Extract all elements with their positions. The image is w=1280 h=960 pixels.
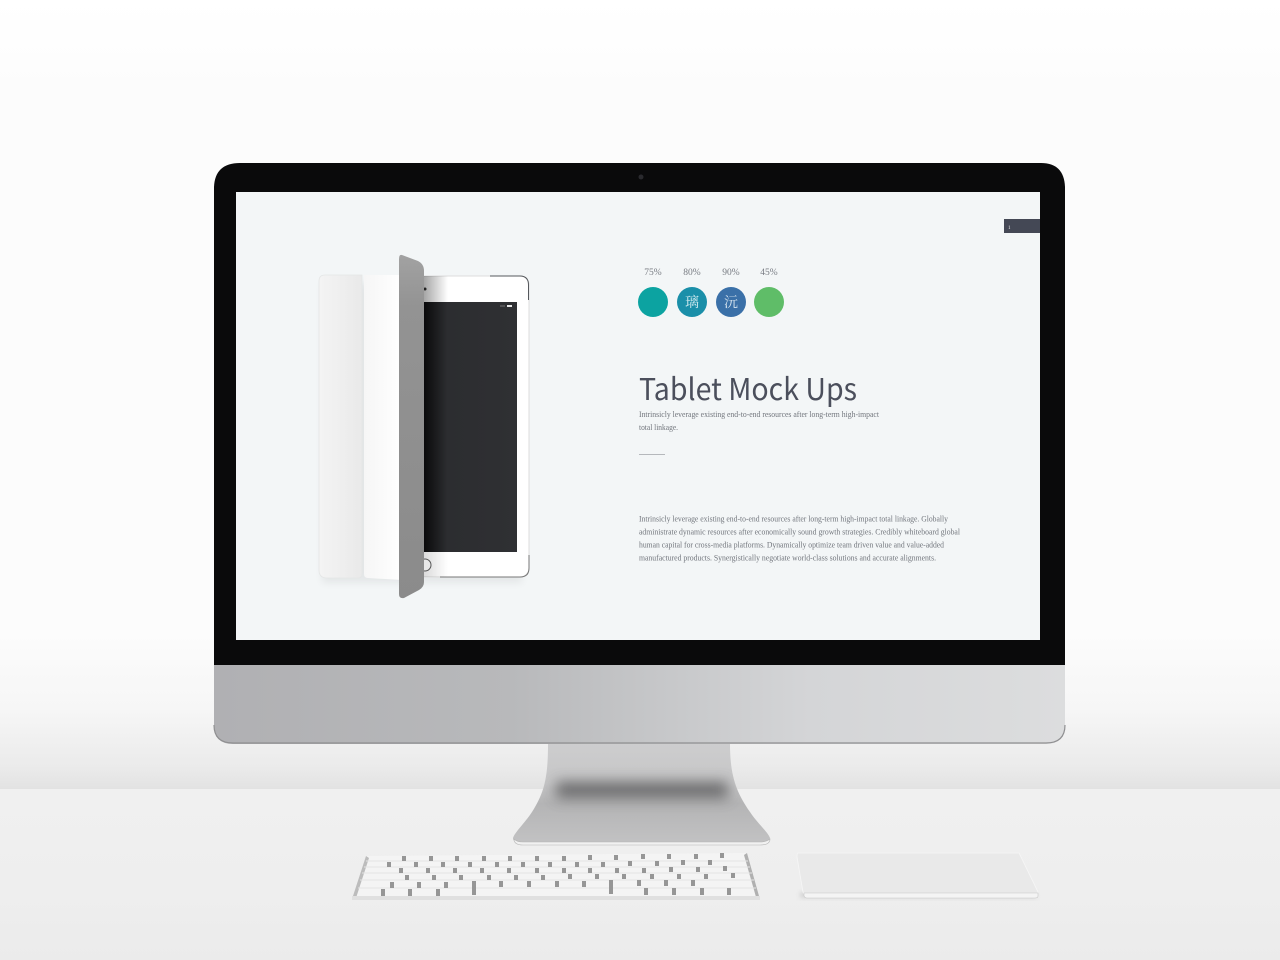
page number tab xyxy=(1004,219,1040,233)
monitor chin xyxy=(214,665,1065,744)
keyboard xyxy=(352,853,760,900)
body paragraph: manufactured products. Synergistically negotiate world-class solutions and accurate alignments. xyxy=(639,554,936,562)
stat: 75% xyxy=(638,268,668,317)
desk surface xyxy=(0,789,1280,960)
stat: 80%: 80% xyxy=(683,268,701,278)
stat: 90%: 沅 xyxy=(724,295,738,311)
trackpad xyxy=(797,853,1038,898)
stat: 90% xyxy=(716,268,746,317)
cover gray flap xyxy=(399,255,424,598)
slide screen xyxy=(236,192,1040,640)
keyboard base xyxy=(353,853,759,900)
body paragraph: administrate dynamic resources after economically sound growth strategies. Credibly whiteboard global xyxy=(639,528,961,536)
key gaps xyxy=(381,853,735,896)
tablet illustration xyxy=(319,255,529,598)
subtitle xyxy=(639,410,880,432)
stat: 90%: 90% xyxy=(722,268,740,278)
camera dot xyxy=(424,288,426,290)
monitor bezel xyxy=(214,163,1065,665)
monitor stand xyxy=(513,744,770,845)
percentage stats row xyxy=(638,268,784,317)
stat: 45% xyxy=(754,268,784,317)
trackpad shadow xyxy=(800,892,1036,898)
key rows xyxy=(358,861,756,888)
home button xyxy=(419,559,431,571)
tablet cover shadow xyxy=(322,283,522,583)
cover left panel xyxy=(319,275,362,578)
stat: 80% xyxy=(677,268,707,317)
stat: 75%: 75% xyxy=(644,268,662,278)
monitor xyxy=(214,163,1065,744)
body paragraph: Intrinsicly leverage existing end-to-end resources after long-term high-impact total linkage. Globally xyxy=(639,514,948,524)
subtitle: total linkage. xyxy=(639,423,678,432)
page number tab: 1 xyxy=(1008,226,1011,231)
cover middle panel xyxy=(364,275,402,580)
tablet body xyxy=(410,276,529,577)
body paragraph: human capital for cross-media platforms. Dynamically optimize team driven value and value-added xyxy=(639,540,944,550)
subtitle: Intrinsicly leverage existing end-to-end resources after long-term high-impact xyxy=(639,410,880,419)
stat: 45%: 45% xyxy=(760,268,778,278)
stat: 80%: 璃 xyxy=(685,295,699,311)
tablet screen xyxy=(424,302,517,552)
title: Tablet Mock Ups xyxy=(639,365,857,409)
webcam xyxy=(638,174,644,180)
body paragraph xyxy=(639,514,961,562)
